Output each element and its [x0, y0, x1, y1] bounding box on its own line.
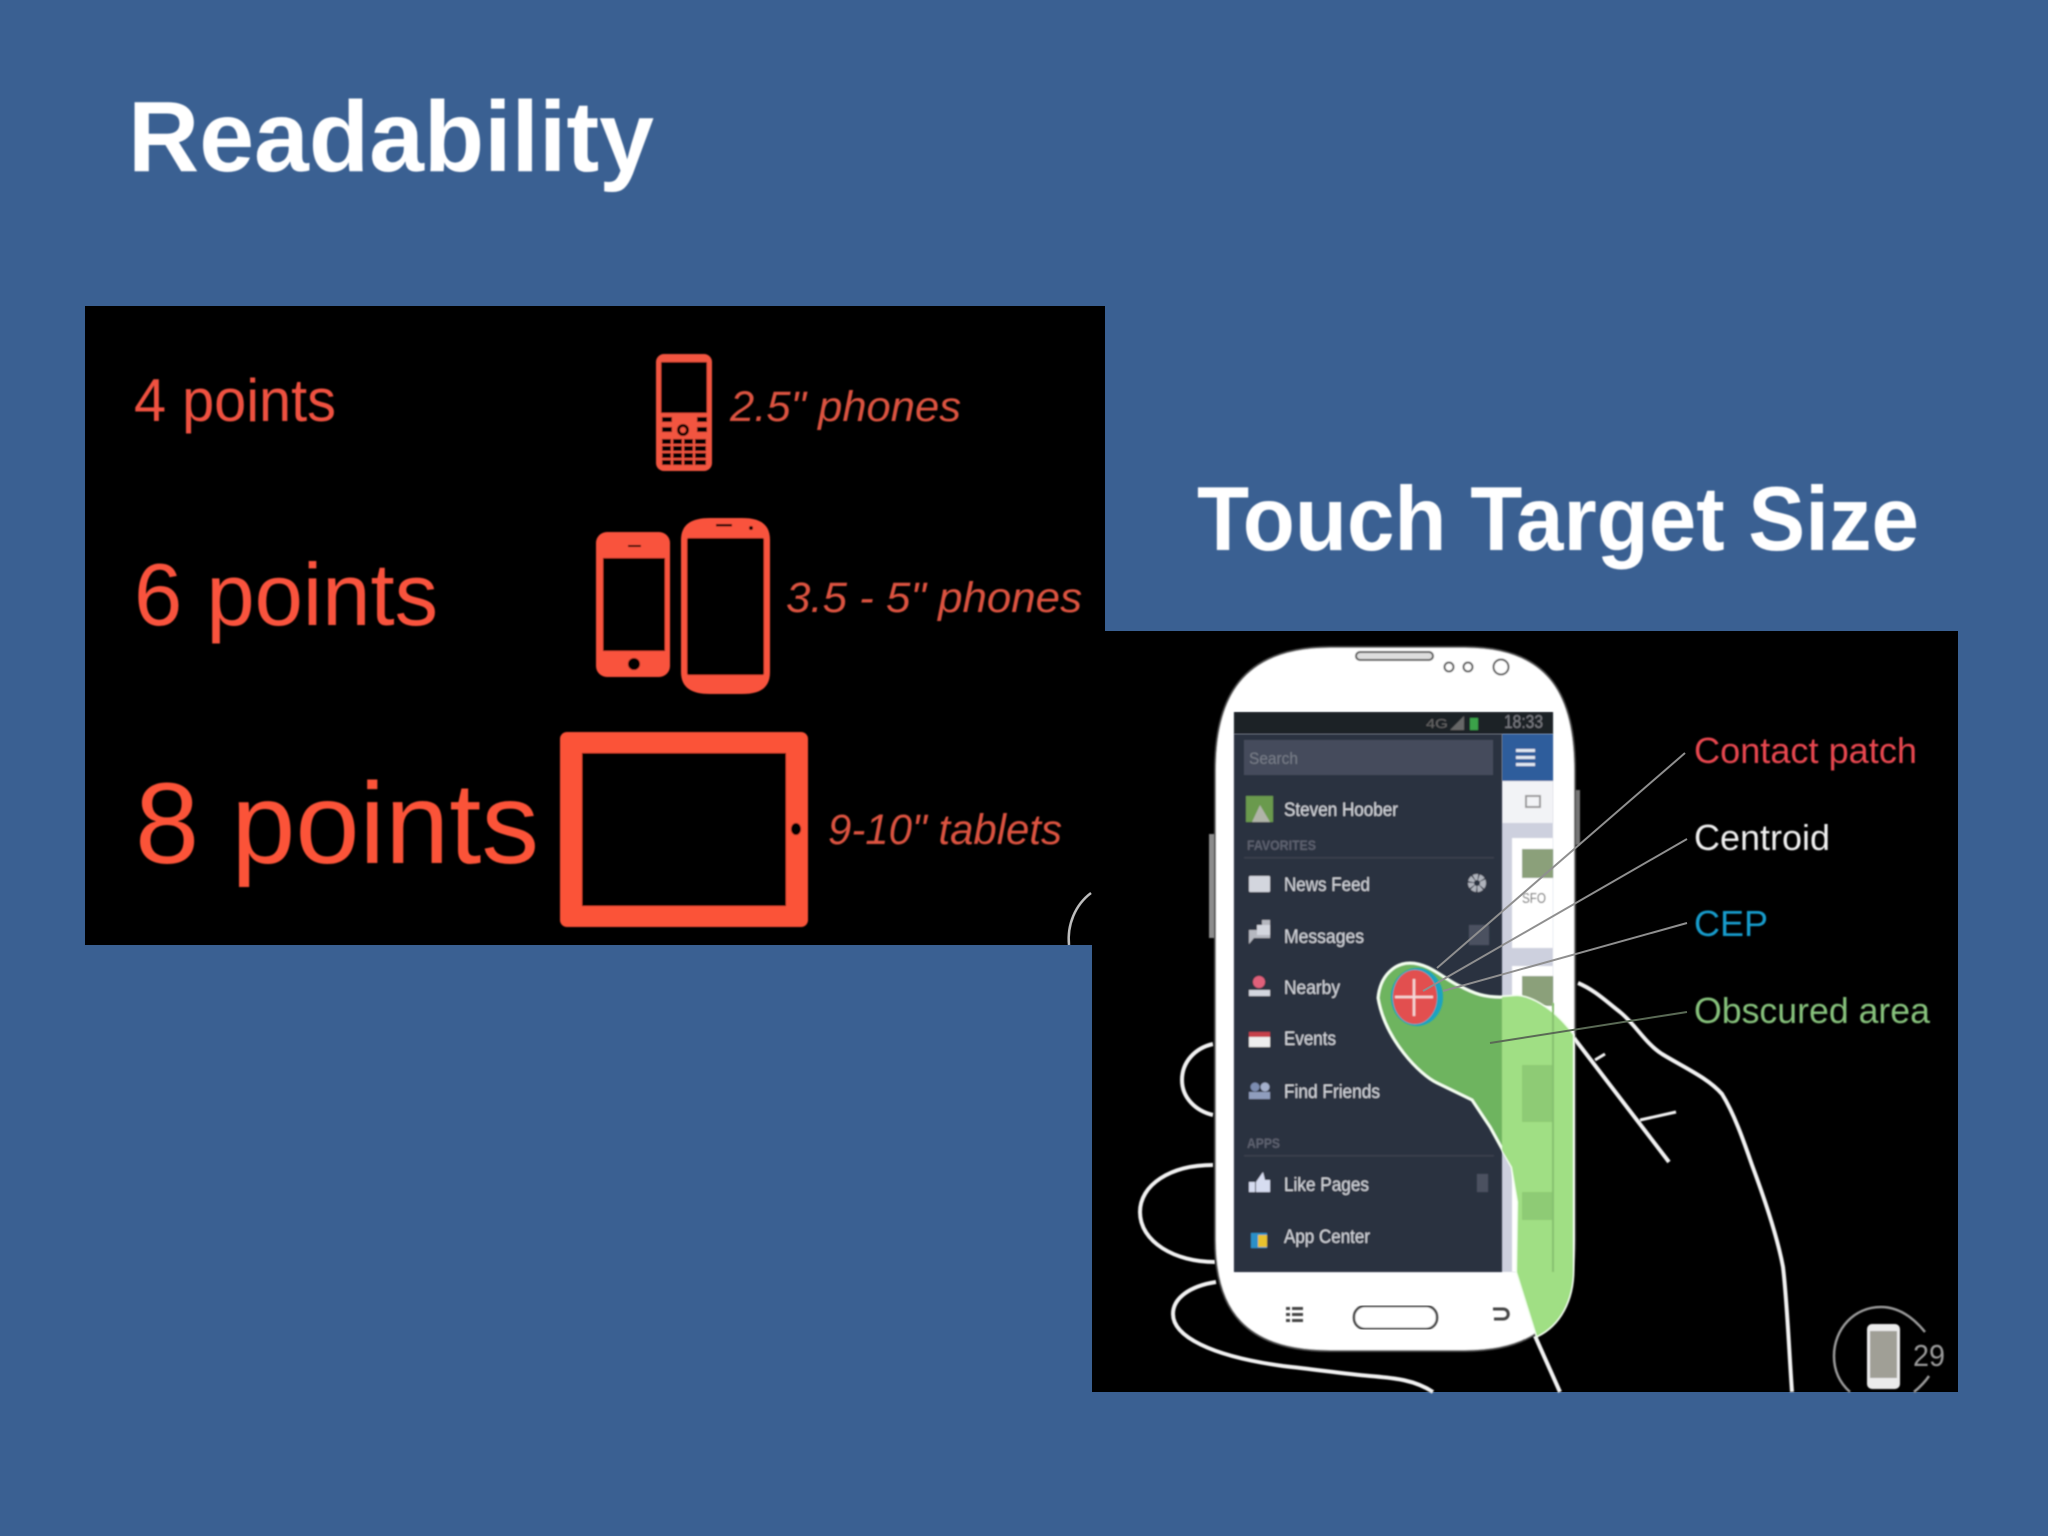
label: Contact patch: Contact patch	[1694, 730, 1917, 771]
pages badge	[1477, 1174, 1488, 1192]
panel: readability	[85, 306, 1105, 945]
navigation drawer	[1234, 734, 1502, 1272]
status bar	[1234, 712, 1553, 734]
section headings: APPS	[1247, 1135, 1280, 1151]
menu icons	[1249, 876, 1270, 1248]
status bar: 4G	[1426, 716, 1448, 731]
leader lines	[1423, 753, 1687, 1043]
partial badge arc	[1069, 893, 1091, 945]
menu text: Find Friends	[1284, 1082, 1380, 1103]
menu text: App Center	[1284, 1227, 1371, 1248]
section headings: FAVORITES	[1247, 837, 1316, 853]
icon: small smartphone	[596, 532, 670, 677]
menu text: Messages	[1284, 927, 1364, 948]
sensors and camera	[1444, 660, 1508, 674]
label: 9-10 inch tablets: 9-10" tablets	[828, 806, 1062, 854]
status bar: 18:33	[1504, 712, 1543, 732]
app content column	[1502, 734, 1553, 1272]
menu text	[1284, 800, 1399, 1248]
icon: feature phone	[656, 354, 712, 471]
menu text: Like Pages	[1284, 1175, 1369, 1196]
hardware buttons	[1286, 1306, 1508, 1329]
panel: touch target	[1069, 631, 1958, 1392]
section headings	[1247, 837, 1316, 1151]
gear icon	[1471, 877, 1483, 889]
hand outline: left fingers	[1140, 1044, 1433, 1392]
phone body	[1209, 647, 1580, 1351]
messages badge	[1469, 925, 1489, 945]
avatar	[1246, 796, 1273, 822]
speaker	[1356, 652, 1433, 660]
menu text: Events	[1284, 1029, 1336, 1050]
title: Touch Target Size: Touch Target Size	[1197, 469, 1919, 570]
menu text: News Feed	[1284, 875, 1370, 896]
row label: 4 points: 4 points	[134, 367, 336, 434]
menu text: Steven Hoober	[1284, 800, 1399, 821]
hand outline: right side	[1535, 983, 1792, 1392]
app content column: SFO	[1522, 890, 1546, 907]
label: Centroid: Centroid	[1694, 817, 1830, 858]
search box	[1244, 740, 1493, 775]
label: 3.5 to 5 inch phones: 3.5 - 5" phones	[786, 574, 1082, 622]
icon: tablet	[560, 732, 808, 927]
row label: 8 points: 8 points	[135, 760, 539, 888]
label: CEP: CEP	[1694, 903, 1768, 944]
slide number badge	[1834, 1307, 1945, 1392]
contact patch and centroid	[1391, 968, 1443, 1026]
search text: Search	[1249, 749, 1298, 768]
title: Readability: Readability	[128, 81, 654, 193]
icon: large smartphone	[681, 518, 770, 694]
slide number badge: 29	[1913, 1338, 1945, 1373]
label: 2.5 inch phones: 2.5" phones	[729, 383, 961, 431]
label: Obscured area: Obscured area	[1694, 990, 1931, 1031]
row label: 6 points: 6 points	[134, 545, 438, 644]
menu text: Nearby	[1284, 978, 1340, 999]
thumb: obscured area	[1378, 963, 1573, 1336]
screen	[1234, 712, 1553, 1272]
